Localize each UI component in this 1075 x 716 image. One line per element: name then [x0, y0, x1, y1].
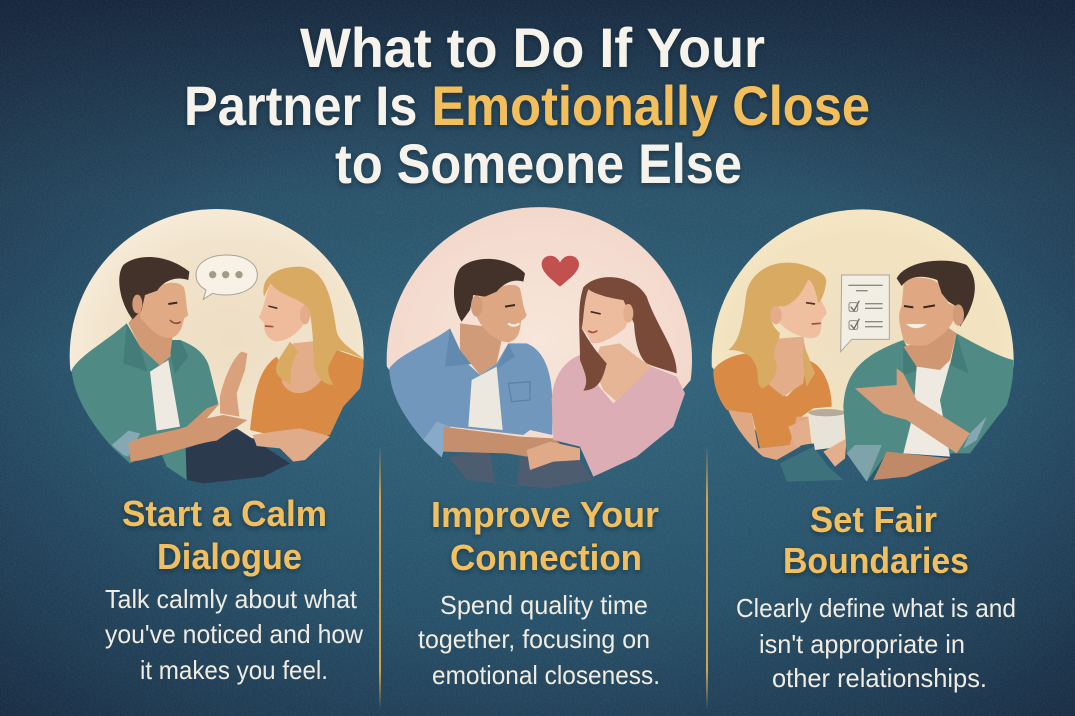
panel: start a calm dialogue [105, 493, 363, 685]
heading: set fair boundaries: Boundaries [783, 540, 969, 581]
heading: start a calm dialogue [122, 493, 327, 577]
text: connection description: emotional closeness. [432, 660, 660, 690]
divider lines [379, 445, 708, 710]
icon: checklist note [841, 275, 889, 352]
heading: set fair boundaries: Set Fair [810, 499, 937, 540]
woman in orange top with mug [713, 263, 847, 482]
text: dialogue description [105, 584, 363, 685]
text: connection description: together, focusing on [418, 624, 650, 654]
title [184, 16, 870, 195]
text: boundaries description: Clearly define what is and [736, 593, 1016, 623]
illustration: couple connecting [387, 207, 692, 488]
heading: set fair boundaries [783, 499, 969, 581]
title: to Someone Else [335, 132, 742, 195]
text: boundaries description [736, 593, 1016, 693]
title: What to Do If Your [300, 16, 765, 79]
icon: speech bubble with dots [196, 255, 257, 299]
text: connection description [418, 590, 660, 690]
icon: heart [542, 256, 579, 287]
title: Partner Is Emotionally Close [184, 74, 870, 137]
text: dialogue description: Talk calmly about what [105, 584, 358, 614]
text: dialogue description: it makes you feel. [140, 655, 328, 685]
text: boundaries description: other relationships. [772, 663, 987, 693]
text: boundaries description: isn't appropriate in [759, 629, 965, 659]
woman in pink sweater [527, 277, 685, 477]
heading: improve your connection [431, 494, 659, 578]
panel: set fair boundaries [736, 499, 1016, 693]
heading: improve your connection: Improve Your [431, 494, 659, 535]
text: connection description: Spend quality time [440, 590, 648, 620]
heading: start a calm dialogue: Start a Calm [122, 493, 327, 534]
heading: improve your connection: Connection [450, 537, 642, 578]
woman in orange top [250, 267, 365, 462]
panel: improve your connection [418, 494, 660, 690]
illustration: couple setting boundaries [712, 209, 1014, 482]
man in teal shirt [72, 257, 290, 483]
man in denim shirt [389, 259, 593, 488]
man in teal shirt [843, 261, 1013, 482]
illustration: couple in dialogue [70, 209, 365, 483]
text: dialogue description: you've noticed and how [105, 619, 363, 649]
heading: start a calm dialogue: Dialogue [157, 536, 302, 577]
